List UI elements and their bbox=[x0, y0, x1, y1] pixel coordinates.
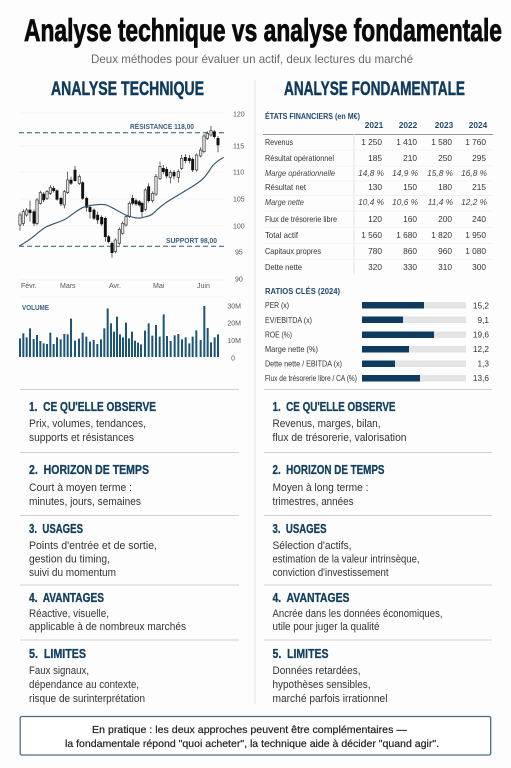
ratio: dette nette / EBITDA bbox=[265, 358, 489, 368]
section right 5: limites bbox=[272, 647, 388, 705]
section right 2: horizon de temps: trimestres, années bbox=[272, 496, 354, 508]
section right 5: limites: marché parfois irrationnel bbox=[272, 693, 388, 705]
row: revenus: 1 250 bbox=[361, 137, 382, 147]
section left 1: ce qu'elle observe: 1. CE QU'ELLE OBSERVE bbox=[29, 400, 156, 414]
callout: en pratique bbox=[20, 716, 491, 755]
ratio: EV/EBITDA bbox=[265, 315, 489, 325]
panel: analyse technique bbox=[19, 79, 245, 362]
section left 3: usages: suivi du momentum bbox=[29, 567, 116, 579]
table: états financiers: ÉTATS FINANCIERS (en M€) bbox=[265, 112, 360, 121]
row: résultat net: 180 bbox=[438, 182, 452, 192]
volume axis: 20M bbox=[227, 320, 241, 328]
row: dette nette: 330 bbox=[403, 262, 417, 272]
volume chart bbox=[20, 304, 241, 362]
row: capitaux propres: 960 bbox=[438, 246, 452, 256]
row: flux de trésorerie libre: 200 bbox=[438, 214, 452, 224]
row: résultat opérationnel bbox=[265, 153, 486, 163]
heading: analyse technique: ANALYSE TECHNIQUE bbox=[51, 79, 204, 100]
month axis: Mai bbox=[153, 283, 165, 290]
row: flux de trésorerie libre: Flux de trésorerie libre bbox=[265, 214, 337, 224]
row: flux de trésorerie libre: 120 bbox=[368, 214, 382, 224]
row: revenus: 1 410 bbox=[396, 137, 417, 147]
subtitle: Deux méthodes pour évaluer un actif, deux lectures du marché bbox=[91, 52, 413, 66]
table: états financiers: 2022 bbox=[399, 120, 418, 130]
ratio: PER: PER (x) bbox=[265, 300, 289, 310]
row: total actif: 1 950 bbox=[465, 230, 486, 240]
volume axis: 0 bbox=[231, 356, 235, 362]
row: marge nette: 11,4 % bbox=[428, 197, 454, 207]
row: résultat opérationnel: 250 bbox=[438, 153, 452, 163]
price axis: 105 bbox=[233, 196, 245, 204]
row: dette nette: Dette nette bbox=[265, 262, 302, 272]
section left 2: horizon de temps: 2. HORIZON DE TEMPS bbox=[29, 463, 149, 477]
ratio: dette nette / EBITDA: 1,3 bbox=[477, 358, 489, 368]
volume bars bbox=[20, 306, 218, 357]
price axis: 90 bbox=[235, 276, 243, 284]
section left 1: ce qu'elle observe bbox=[29, 400, 156, 444]
callout: en pratique: la fondamentale répond "quoi acheter", la technique aide à décider "quand agir". bbox=[65, 738, 439, 750]
candles bbox=[19, 126, 219, 258]
section right 2: horizon de temps: 2. HORIZON DE TEMPS bbox=[272, 463, 384, 477]
section right 3: usages: 3. USAGES bbox=[272, 522, 326, 536]
row: résultat net: 150 bbox=[403, 182, 417, 192]
row: marge nette: 10,6 % bbox=[392, 197, 419, 207]
section left 4: avantages bbox=[29, 591, 186, 633]
row: total actif: 1 680 bbox=[396, 230, 417, 240]
section right 4: avantages: utile pour juger la qualité bbox=[272, 621, 380, 633]
section left 1: ce qu'elle observe: supports et résistances bbox=[29, 432, 134, 444]
row: résultat opérationnel: 185 bbox=[368, 153, 382, 163]
chart: ratios clés bbox=[265, 287, 489, 383]
price axis: 95 bbox=[235, 250, 243, 256]
row: revenus: 1 760 bbox=[465, 137, 486, 147]
ratio: marge nette bbox=[265, 344, 489, 354]
row: résultat opérationnel: 295 bbox=[472, 153, 486, 163]
panel: analyse fondamentale bbox=[263, 79, 493, 383]
ratio: flux de trésorerie libre / CA: 13,6 bbox=[473, 373, 489, 383]
row: résultat opérationnel: Résultat opérationnel bbox=[265, 153, 334, 163]
section left 2: horizon de temps: Court à moyen terme : bbox=[29, 482, 132, 494]
row: marge opérationnelle: 14,9 % bbox=[392, 168, 419, 178]
row: résultat opérationnel: 210 bbox=[403, 153, 417, 163]
section right 2: horizon de temps bbox=[272, 463, 384, 508]
price axis bbox=[233, 112, 245, 284]
candlestick chart bbox=[19, 112, 245, 297]
ratio: flux de trésorerie libre / CA bbox=[265, 373, 489, 383]
row: flux de trésorerie libre: 160 bbox=[403, 214, 417, 224]
row: capitaux propres: 780 bbox=[368, 246, 382, 256]
section right 1: ce qu'elle observe: 1. CE QU'ELLE OBSERVE bbox=[272, 400, 396, 414]
ratio: ROE: 19,6 bbox=[473, 330, 489, 340]
section left 5: limites: risque de surinterprétation bbox=[29, 693, 145, 705]
row: capitaux propres: 1 080 bbox=[465, 246, 486, 256]
section right 3: usages: conviction d'investissement bbox=[272, 567, 388, 579]
row: capitaux propres: Capitaux propres bbox=[265, 246, 321, 256]
row: marge opérationnelle: Marge opérationnelle bbox=[265, 168, 335, 178]
row: dette nette: 300 bbox=[472, 262, 486, 272]
table: états financiers bbox=[263, 112, 493, 275]
resistance line: RÉSISTANCE 118,00 bbox=[130, 122, 194, 131]
volume chart: VOLUME bbox=[22, 305, 49, 312]
section right 5: limites: hypothèses sensibles, bbox=[272, 679, 370, 691]
row: dette nette bbox=[265, 262, 486, 272]
row: marge nette bbox=[265, 197, 488, 207]
row: total actif: 1 820 bbox=[431, 230, 452, 240]
price axis: 120 bbox=[233, 112, 245, 118]
table: états financiers: 2021 bbox=[365, 120, 384, 130]
row: total actif: Total actif bbox=[265, 230, 299, 240]
ratio: PER bbox=[265, 300, 489, 310]
row: marge opérationnelle: 15,8 % bbox=[427, 168, 454, 178]
month axis: Mars bbox=[60, 283, 76, 290]
section right 4: avantages bbox=[272, 591, 442, 633]
row: résultat net bbox=[265, 182, 486, 192]
month axis bbox=[21, 283, 210, 290]
month axis: Avr. bbox=[109, 283, 121, 290]
table: états financiers: 2023 bbox=[435, 120, 454, 130]
price axis: 115 bbox=[233, 144, 244, 150]
ratio: flux de trésorerie libre / CA: Flux de trésorerie libre / CA (%) bbox=[265, 373, 357, 383]
section left 5: limites bbox=[29, 647, 145, 705]
row: résultat net: 130 bbox=[368, 182, 382, 192]
section left 5: limites: Faux signaux, bbox=[29, 665, 89, 677]
section left 3: usages: 3. USAGES bbox=[29, 522, 83, 536]
ratio: dette nette / EBITDA: Dette nette / EBITDA (x) bbox=[265, 358, 342, 368]
moving average bbox=[19, 157, 224, 246]
volume axis: 10M bbox=[227, 338, 241, 345]
section left 4: avantages: 4. AVANTAGES bbox=[29, 591, 104, 605]
ratio: ROE: ROE (%) bbox=[265, 330, 292, 340]
row: marge nette: 12,2 % bbox=[461, 197, 488, 207]
row: résultat net: Résultat net bbox=[265, 182, 307, 192]
section right 3: usages bbox=[272, 522, 420, 579]
section right 1: ce qu'elle observe: flux de trésorerie, valorisation bbox=[272, 432, 406, 444]
section right 5: limites: 5. LIMITES bbox=[272, 647, 328, 661]
section left 5: limites: 5. LIMITES bbox=[29, 647, 86, 661]
row: capitaux propres bbox=[265, 246, 486, 256]
row: flux de trésorerie libre: 240 bbox=[472, 214, 486, 224]
row: dette nette: 310 bbox=[438, 262, 452, 272]
ratio: marge nette: Marge nette (%) bbox=[265, 344, 318, 354]
section right 5: limites: Données retardées, bbox=[272, 665, 360, 677]
support line: SUPPORT 98,00 bbox=[166, 236, 217, 245]
volume axis: 30M bbox=[227, 304, 241, 310]
section right 1: ce qu'elle observe bbox=[272, 400, 406, 444]
row: total actif: 1 560 bbox=[361, 230, 382, 240]
ratio: PER: 15,2 bbox=[473, 300, 489, 310]
row: dette nette: 320 bbox=[368, 262, 382, 272]
month axis: Juin bbox=[197, 283, 210, 290]
row: marge nette: 10,4 % bbox=[358, 197, 385, 207]
section left 3: usages: Points d'entrée et de sortie, bbox=[29, 540, 157, 552]
month axis: Févr. bbox=[21, 283, 37, 290]
section left 2: horizon de temps bbox=[29, 463, 149, 508]
section right 3: usages: estimation de la valeur intrinsèque, bbox=[272, 554, 420, 566]
section left 1: ce qu'elle observe: Prix, volumes, tendances, bbox=[29, 418, 146, 430]
ratio: EV/EBITDA: EV/EBITDA (x) bbox=[265, 315, 312, 325]
price axis: 110 bbox=[233, 170, 244, 176]
chart: ratios clés: RATIOS CLÉS (2024) bbox=[265, 287, 340, 296]
section left 4: avantages: Réactive, visuelle, bbox=[29, 608, 109, 620]
row: flux de trésorerie libre bbox=[265, 214, 486, 224]
ratio: ROE bbox=[265, 330, 489, 340]
row: revenus bbox=[265, 137, 486, 147]
section left 5: limites: dépendance au contexte, bbox=[29, 679, 139, 691]
section left 3: usages bbox=[29, 522, 157, 579]
row: marge opérationnelle: 14,8 % bbox=[358, 168, 385, 178]
row: revenus: 1 580 bbox=[431, 137, 452, 147]
row: marge opérationnelle bbox=[265, 168, 488, 178]
volume axis bbox=[227, 304, 241, 362]
price axis: 100 bbox=[233, 224, 245, 230]
row: marge opérationnelle: 16,8 % bbox=[461, 168, 488, 178]
row: revenus: Revenus bbox=[265, 137, 293, 147]
row: résultat net: 215 bbox=[472, 182, 486, 192]
row: capitaux propres: 860 bbox=[403, 246, 417, 256]
section left 2: horizon de temps: minutes, jours, semaines bbox=[29, 496, 141, 508]
section left 4: avantages: applicable à de nombreux marchés bbox=[29, 621, 186, 633]
row: marge nette: Marge nette bbox=[265, 197, 304, 207]
section right 4: avantages: 4. AVANTAGES bbox=[272, 591, 350, 605]
table: états financiers: 2024 bbox=[469, 120, 488, 130]
section right 1: ce qu'elle observe: Revenus, marges, bilan, bbox=[272, 418, 380, 430]
ratio: marge nette: 12,2 bbox=[473, 344, 489, 354]
section left 3: usages: gestion du timing, bbox=[29, 554, 110, 566]
ratio: EV/EBITDA: 9,1 bbox=[477, 315, 489, 325]
row: total actif bbox=[265, 230, 486, 240]
callout: en pratique: En pratique : les deux approches peuvent être complémentaires — bbox=[92, 724, 408, 736]
section right 3: usages: Sélection d'actifs, bbox=[272, 540, 352, 552]
section right 4: avantages: Ancrée dans les données économiques, bbox=[272, 608, 442, 620]
section right 2: horizon de temps: Moyen à long terme : bbox=[272, 482, 368, 494]
